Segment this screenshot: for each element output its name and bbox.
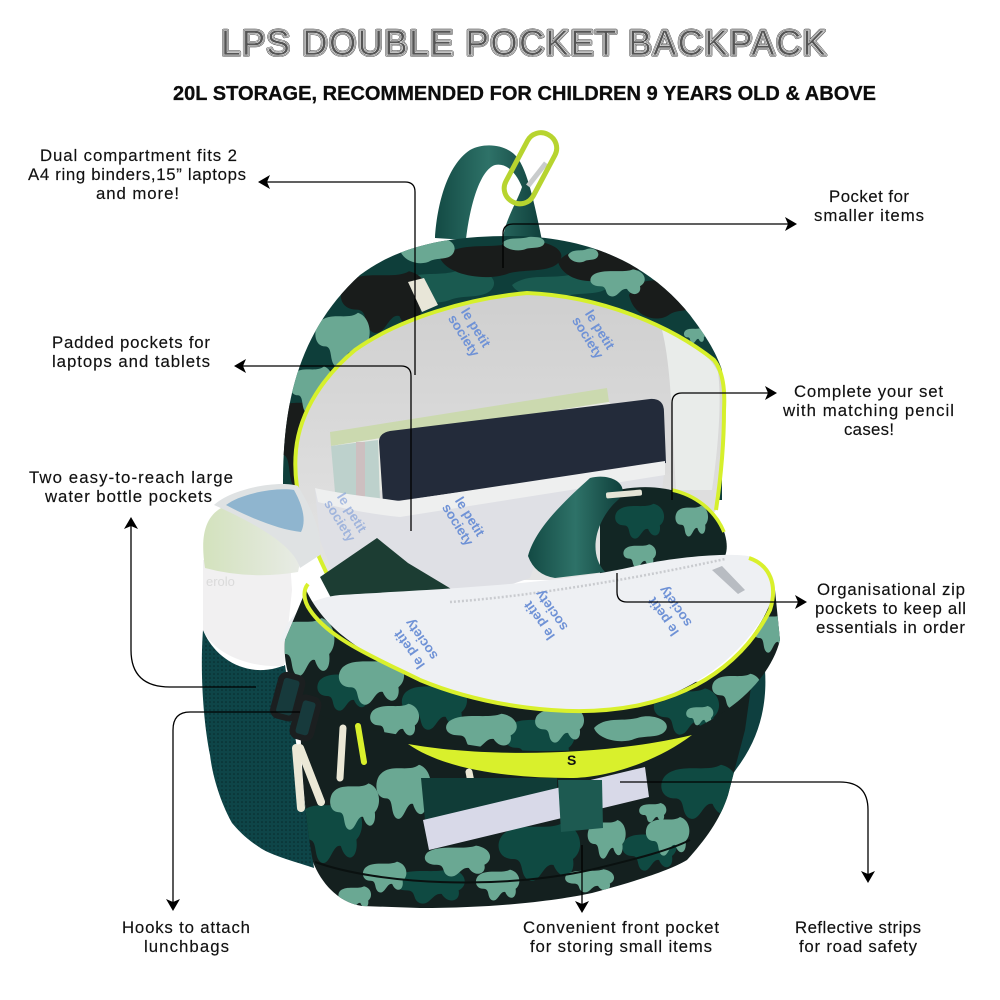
label: front pocket: Convenient front pocket: [523, 918, 719, 937]
pocket hem: [315, 461, 665, 517]
centre strap tab: [558, 780, 603, 832]
zip pulls: [296, 726, 471, 808]
label: dual compartment: A4 ring binders,15” laptops: [28, 165, 246, 184]
arrow: hooks: [166, 712, 300, 911]
label: padded pockets: Padded pockets for: [52, 333, 210, 352]
backpack lower body: [295, 675, 755, 915]
label: organisational pockets: essentials in order: [816, 618, 965, 637]
backpack upper dome: [269, 230, 730, 505]
pocket dark band: [421, 778, 557, 820]
logo prints on lining: le petit: [458, 305, 494, 350]
title: LPS DOUBLE POCKET BACKPACK: [221, 24, 826, 63]
hook buckle: [272, 674, 320, 740]
label: reflective strips: [795, 918, 921, 956]
logo prints on pocket: le petit: [452, 494, 488, 539]
title: LPS DOUBLE POCKET BACKPACK: [221, 24, 826, 63]
interior lining: [295, 293, 724, 580]
logo prints on lining: le petit: [582, 307, 618, 352]
green strap loop: [528, 477, 623, 578]
label: bottle pockets: water bottle pockets: [44, 487, 212, 506]
pencil case zip: [672, 490, 724, 532]
logo prints on lining: society: [569, 314, 607, 362]
logo prints on flap: society: [532, 587, 571, 634]
logo prints on pocket: society: [439, 501, 477, 549]
label: bottle pockets: [29, 468, 233, 506]
arrow: bottle pockets: [124, 517, 256, 687]
label: pocket for smaller items: smaller items: [814, 206, 924, 225]
logo prints on flap: le petit: [520, 598, 558, 643]
label: pencil cases: cases!: [844, 420, 894, 439]
logo prints on flap: le petit: [644, 594, 682, 639]
label: pencil cases: Complete your set: [794, 382, 943, 401]
flap yellow trim: [304, 558, 773, 711]
arrow: reflective strips: [620, 782, 875, 883]
arrow: dual compartment: [258, 175, 415, 375]
flap zip pull: [712, 566, 745, 594]
label: padded pockets: [52, 333, 210, 371]
inner pocket: [315, 463, 665, 602]
label: dual compartment: Dual compartment fits 2: [40, 146, 237, 165]
label: reflective strips: Reflective strips: [795, 918, 921, 937]
label: pencil cases: with matching pencil: [782, 401, 954, 420]
tablet: [379, 399, 666, 503]
label: pocket for smaller items: Pocket for: [829, 187, 909, 206]
label: reflective strips: for road safety: [799, 937, 918, 956]
water bottle: [203, 484, 320, 666]
logo prints on flap: le petit: [390, 627, 428, 672]
backpack illustration: [202, 127, 791, 915]
subtitle: 20L STORAGE, RECOMMENDED FOR CHILDREN 9 YEARS OLD & ABOVE: [173, 83, 876, 105]
flap camo lip: [284, 590, 780, 752]
label: pencil cases: [782, 382, 954, 439]
label: bottle pockets: Two easy-to-reach large: [29, 468, 233, 487]
label: organisational pockets: pockets to keep all: [815, 599, 966, 618]
right lining panel: [662, 330, 720, 490]
label: hooks: Hooks to attach: [122, 918, 250, 937]
label: padded pockets: laptops and tablets: [52, 352, 210, 371]
label: hooks: lunchbags: [144, 937, 229, 956]
title: LPS DOUBLE POCKET BACKPACK: [221, 24, 826, 63]
folded umbrella: [320, 538, 458, 615]
pencil case zip pull: [606, 489, 642, 499]
books: [330, 388, 622, 502]
flap mesh seam: [450, 559, 725, 602]
left mesh pocket: [202, 630, 314, 868]
pencil case: [600, 487, 727, 574]
water bottle: erolo: [206, 574, 235, 589]
label: hooks: [122, 918, 250, 956]
top handle: [435, 145, 542, 240]
logo prints on flap: [390, 583, 695, 672]
label: front pocket: for storing small items: [530, 937, 712, 956]
logo prints on flap: society: [656, 583, 695, 630]
label: pocket for smaller items: [814, 187, 924, 225]
label: organisational pockets: Organisational zip: [817, 580, 965, 599]
zip trim main compartment: [295, 293, 724, 580]
letter mark: S: [567, 752, 576, 768]
yellow zip front: [408, 735, 692, 778]
title: LPS DOUBLE POCKET BACKPACK: [221, 24, 826, 63]
label: dual compartment: and more!: [96, 184, 179, 203]
top zip pull: [408, 278, 438, 312]
right mesh pocket: [715, 670, 765, 800]
logo prints on pocket: le petit: [334, 490, 370, 535]
logo prints on pocket: [321, 490, 488, 549]
flap interior: [280, 555, 775, 713]
logo prints on lining: [445, 305, 618, 362]
reflective strip: [423, 767, 649, 850]
logo prints on pocket: society: [321, 497, 359, 545]
label: organisational pockets: [815, 580, 966, 637]
arrow: padded pockets: [234, 359, 411, 531]
logo prints on flap: society: [402, 616, 441, 663]
label: front pocket: [523, 918, 719, 956]
label: dual compartment: [28, 146, 246, 203]
arrow: pencil cases: [672, 386, 777, 500]
arrow: organisational pockets: [617, 573, 807, 609]
logo prints on lining: society: [445, 312, 483, 360]
arrow: front pocket: [575, 845, 589, 913]
carabiner clip: [499, 127, 562, 209]
arrow: smaller items pocket: [503, 217, 797, 268]
